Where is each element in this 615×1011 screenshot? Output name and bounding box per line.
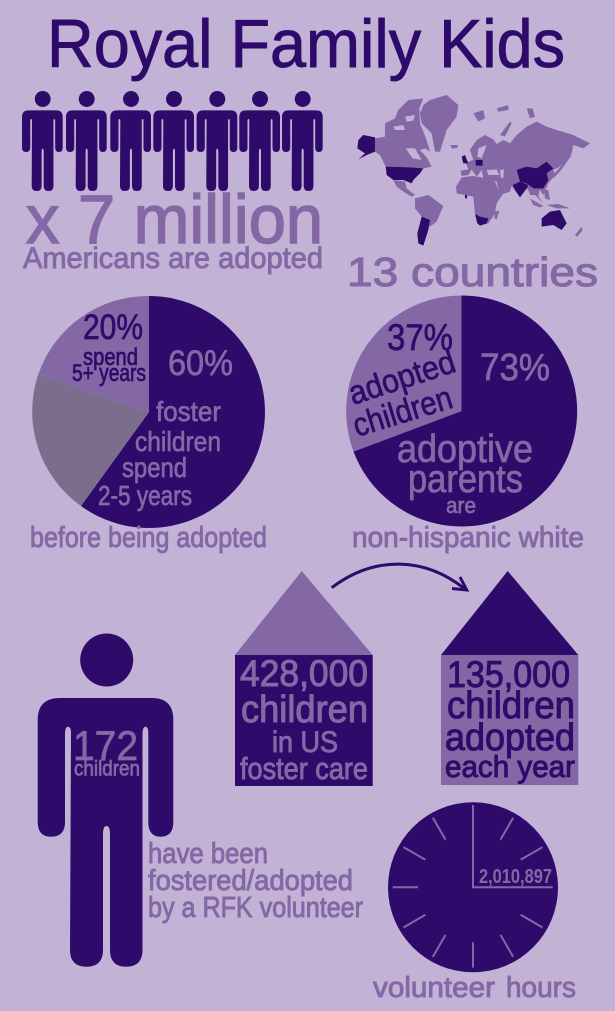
panel: world map 13 countries [347, 95, 598, 295]
label: 73% adoptive parents: parents [408, 458, 523, 501]
house roof [235, 571, 373, 655]
panel: 172 children [38, 634, 363, 967]
label: 37% adopted children [344, 317, 460, 444]
icon: row of seven people [22, 91, 323, 191]
caption: Americans are adopted [23, 242, 323, 275]
icon: clock [388, 802, 558, 972]
clock number: 2,010,897 [479, 866, 552, 888]
panel: volunteer hours [373, 802, 576, 1004]
pie slice: 60% [81, 296, 265, 528]
caption: hours [506, 972, 576, 1004]
label: 37% adopted children: adopted [344, 342, 460, 412]
label: 73% adoptive parents: 73% [480, 347, 550, 389]
icon: large person [38, 634, 173, 967]
house text: adopted [445, 717, 575, 759]
pie slice: 73% [354, 295, 577, 526]
label: 73% adoptive parents: adoptive [397, 428, 533, 471]
label: 37% adopted children: 37% [387, 317, 453, 358]
label: 60% [98, 344, 233, 511]
caption [148, 838, 363, 924]
house roof [441, 571, 578, 655]
house text: 428,000 [240, 653, 368, 694]
label: 60%: 60% [168, 344, 233, 383]
panel: 7 million adopted [22, 91, 323, 275]
house text: foster care [240, 751, 368, 786]
house text: each year [445, 749, 575, 784]
label: 20%: 5+ years [72, 360, 146, 387]
caption [373, 972, 576, 1004]
panel: adopted house [441, 571, 578, 785]
label: 73% adoptive parents [397, 347, 550, 518]
pie slice: 20% [38, 296, 149, 412]
house text: in US [272, 726, 338, 759]
house text [445, 654, 575, 784]
house text: 135,000 [447, 654, 570, 695]
house text [240, 653, 368, 786]
label: 60%: spend [122, 452, 187, 483]
pie slice: remaining [32, 374, 149, 506]
caption: have been [148, 838, 268, 870]
label: 20% [72, 308, 146, 387]
caption: before being adopted [30, 522, 267, 554]
caption: by a RFK volunteer [148, 892, 363, 924]
caption: volunteer [373, 972, 495, 1004]
caption: non-hispanic white [352, 522, 584, 554]
panel: foster care house [235, 571, 373, 786]
label: 60%: foster [156, 396, 221, 427]
arrow [332, 564, 467, 590]
title: Royal Family Kids [47, 6, 565, 82]
label: 20%: spend [83, 344, 138, 371]
panel: adoptive parents pie [344, 295, 584, 554]
pie slice: 37% [346, 296, 462, 452]
label: 172 children: children [74, 758, 140, 781]
caption: 13 countries [347, 249, 598, 295]
house text: children [241, 689, 368, 731]
house body [441, 655, 578, 785]
big number: x 7 million [26, 181, 323, 258]
panel: foster years pie [30, 296, 267, 554]
label: 73% adoptive parents: are [446, 493, 476, 518]
house body [235, 655, 373, 786]
house text: children [447, 685, 575, 727]
world map [357, 95, 590, 246]
caption: fostered/adopted [148, 865, 353, 897]
label: 60%: 2-5 years [98, 480, 192, 511]
label: 37% adopted children: children [348, 378, 457, 444]
label: 60%: children [135, 426, 221, 457]
label: 20%: 20% [83, 308, 143, 347]
label: 172 children: 172 [73, 722, 138, 769]
